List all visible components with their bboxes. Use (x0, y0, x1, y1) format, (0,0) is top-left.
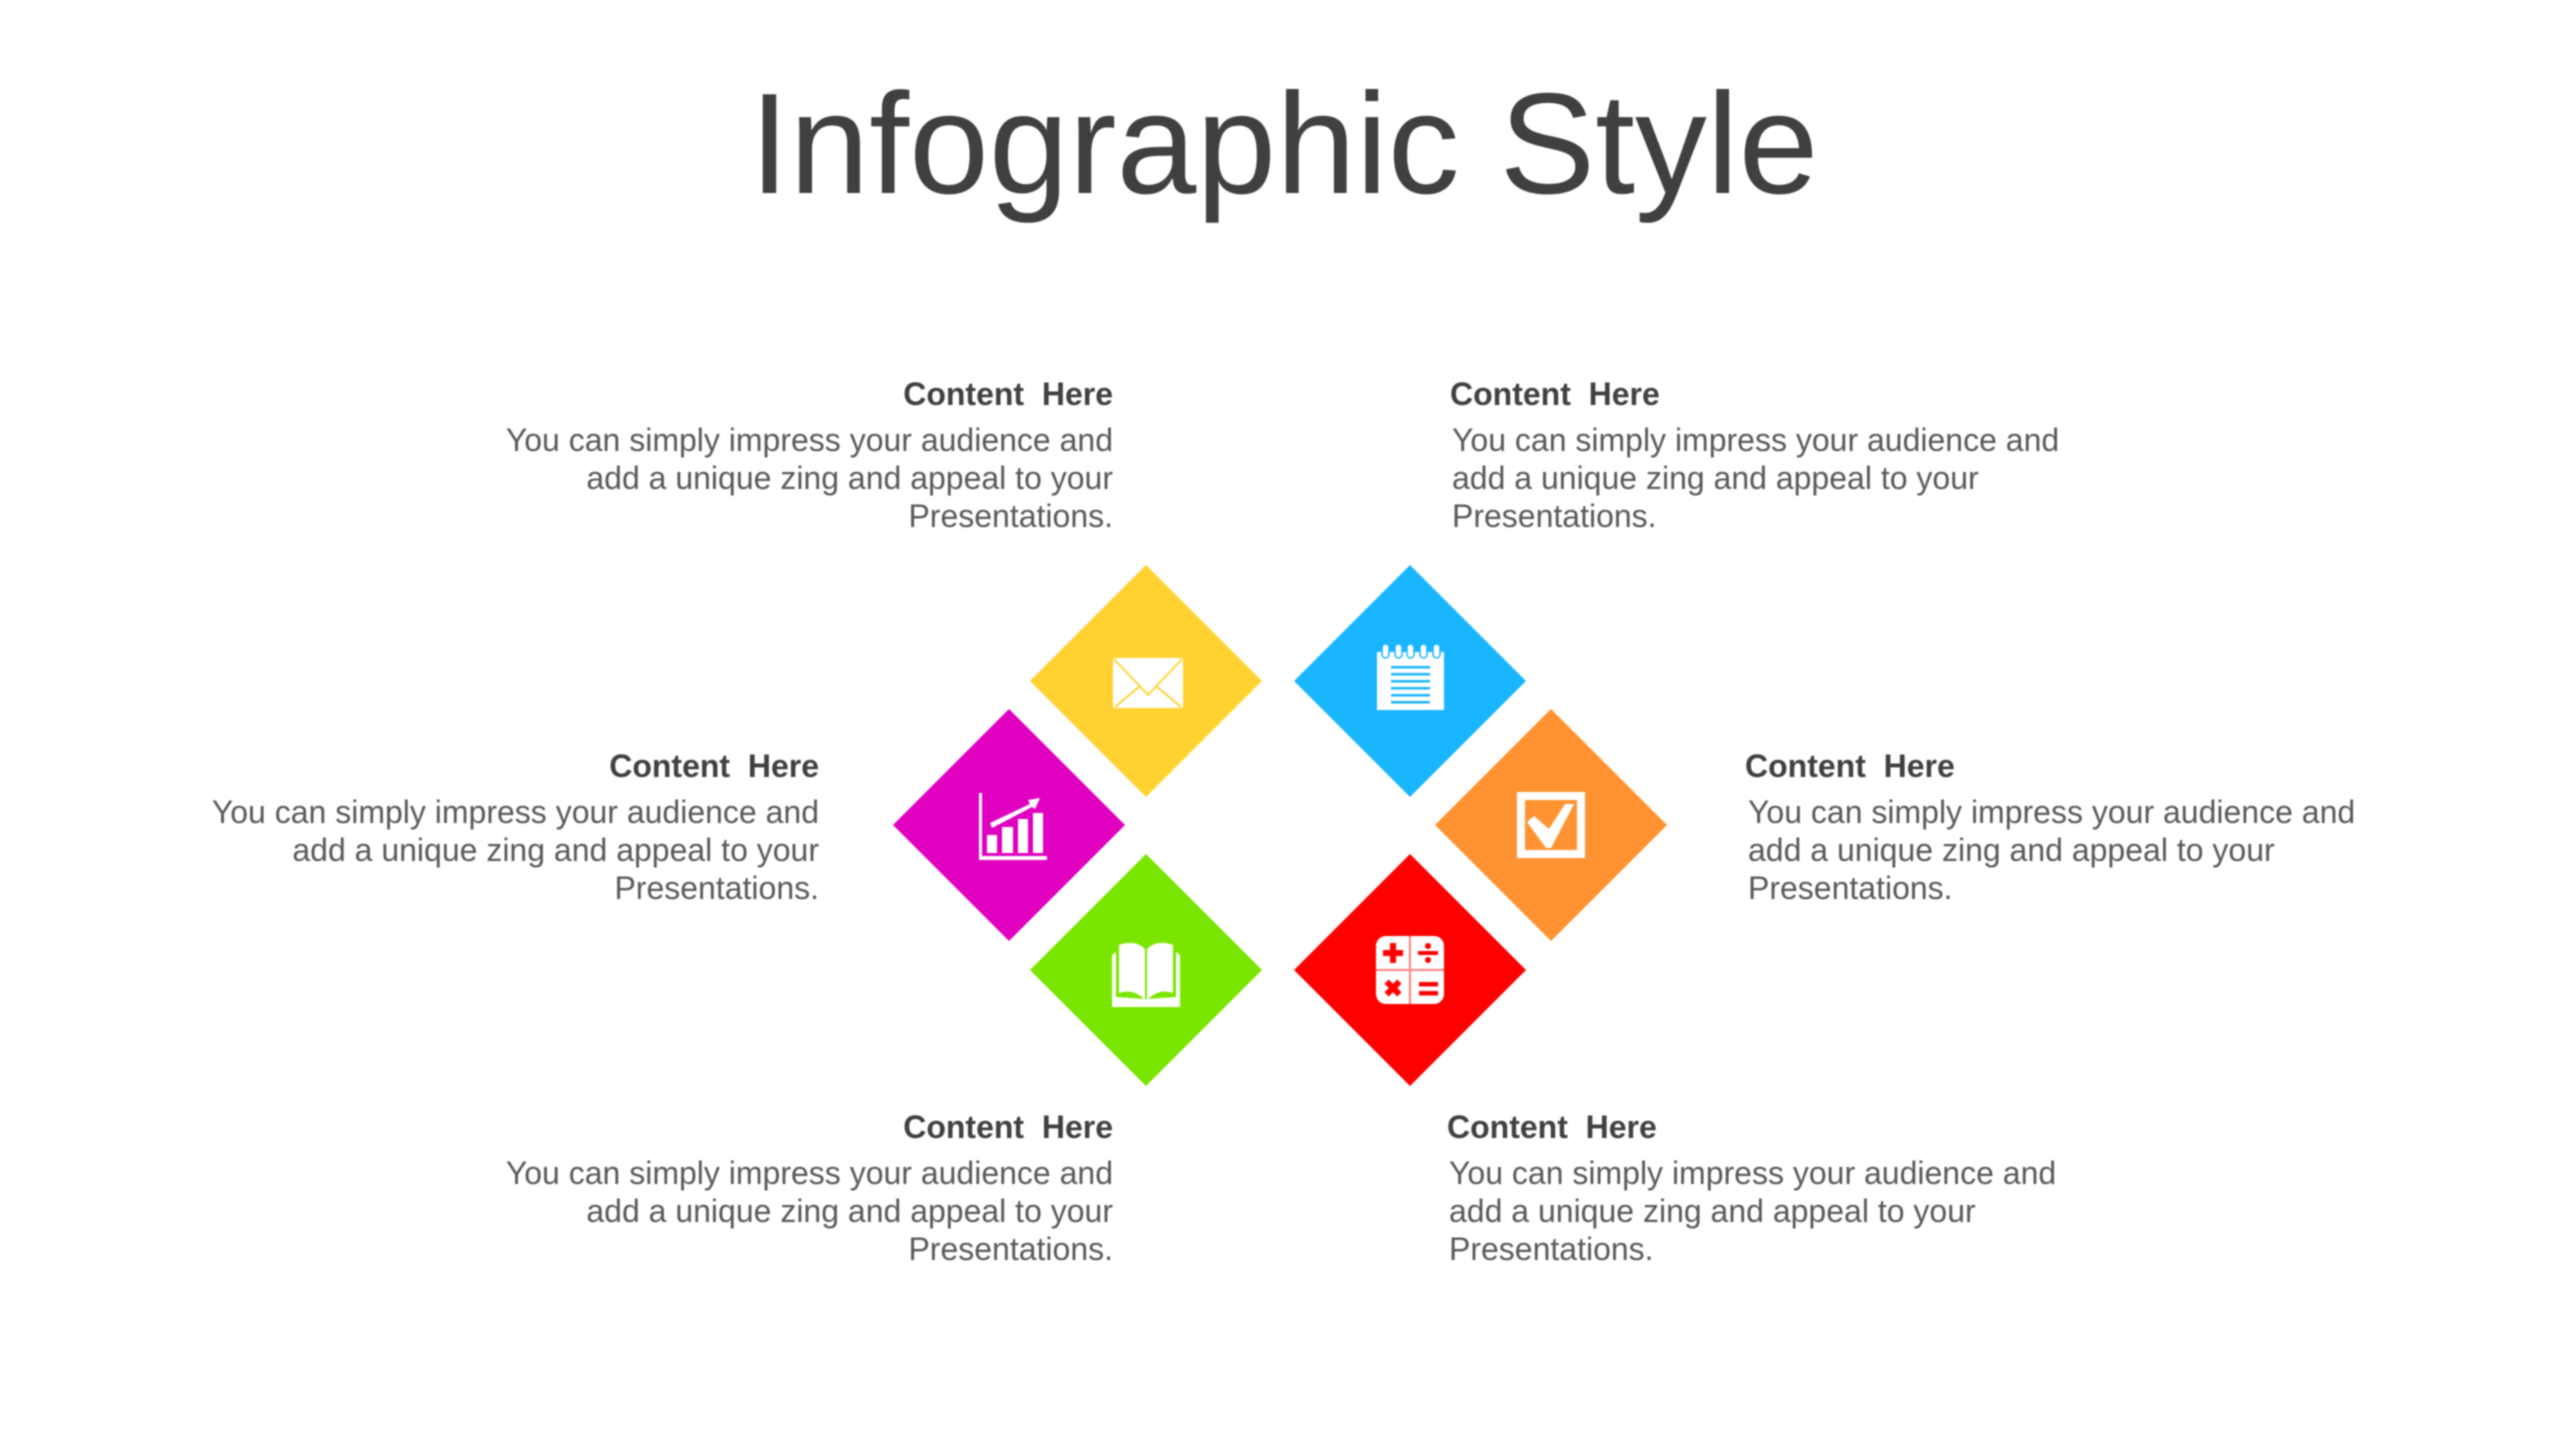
icon: bar chart (979, 793, 1047, 860)
text block: middle left: Presentations. (614, 870, 819, 906)
text block: middle left (212, 748, 819, 906)
text block: middle right: Content Here (1745, 748, 1955, 784)
text block: bottom right: Presentations. (1449, 1231, 1654, 1267)
icon: checkbox (1521, 796, 1581, 854)
text block: middle left: add a unique zing and appeal to your (292, 832, 819, 868)
diamond: blue notepad (1294, 565, 1526, 797)
diamond: orange checkbox (1435, 709, 1667, 941)
text block: top left: add a unique zing and appeal to your (586, 460, 1113, 496)
text block: middle right (1745, 748, 2355, 906)
icon: notepad (1377, 644, 1444, 710)
icon: open book (1112, 943, 1180, 1007)
text block: bottom left: Presentations. (908, 1231, 1113, 1267)
text block: middle left: Content Here (609, 748, 819, 784)
text block: bottom right: add a unique zing and appeal to your (1449, 1193, 1976, 1229)
text block: top left: You can simply impress your audience and (506, 422, 1113, 458)
text block: bottom right (1447, 1109, 2056, 1267)
text block: middle right: You can simply impress your audience and (1748, 794, 2355, 830)
text block: top left (506, 376, 1113, 534)
text block: bottom right: You can simply impress your audience and (1449, 1155, 2056, 1191)
diamond: magenta chart (893, 709, 1125, 941)
diamond: green book (1030, 854, 1262, 1086)
text block: top right: You can simply impress your audience and (1452, 422, 2059, 458)
text block: bottom left: add a unique zing and appeal to your (586, 1193, 1113, 1229)
text block: bottom left (506, 1109, 1113, 1267)
icon: calculator (1376, 936, 1444, 1004)
text block: bottom left: Content Here (903, 1109, 1113, 1145)
title: Infographic Style (750, 64, 1818, 224)
text block: bottom left: You can simply impress your audience and (506, 1155, 1113, 1191)
text block: middle right: add a unique zing and appeal to your (1748, 832, 2275, 868)
text block: top right (1450, 376, 2059, 534)
text block: middle left: You can simply impress your audience and (212, 794, 819, 830)
text block: top right: Content Here (1450, 376, 1660, 412)
text block: top left: Content Here (903, 376, 1113, 412)
diamond: red calculator (1294, 854, 1526, 1086)
text block: middle right: Presentations. (1748, 870, 1953, 906)
text block: top right: Presentations. (1452, 498, 1657, 534)
diamond: yellow mail (1030, 565, 1262, 797)
icon: envelope (1113, 658, 1183, 708)
text block: top left: Presentations. (908, 498, 1113, 534)
text block: top right: add a unique zing and appeal to your (1452, 460, 1979, 496)
text block: bottom right: Content Here (1447, 1109, 1657, 1145)
